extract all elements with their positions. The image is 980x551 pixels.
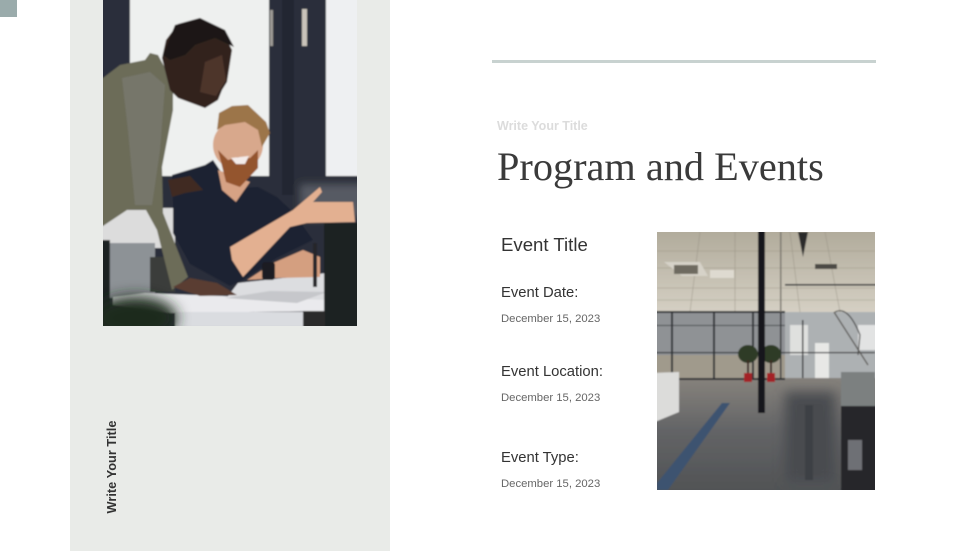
far desk surface — [225, 273, 327, 300]
man 1 hand on desk — [173, 278, 237, 296]
man 1 head and neck — [162, 18, 232, 108]
ceiling vent — [664, 262, 708, 276]
event location block: Event Location: — [501, 364, 603, 380]
panel: left sidebar — [70, 0, 390, 551]
desk — [113, 293, 327, 313]
man 1 shirt — [95, 53, 188, 290]
event location block — [501, 364, 603, 404]
top divider line — [492, 60, 876, 63]
ceiling tile grid — [658, 240, 874, 312]
photo: two colleagues at a desk — [103, 0, 357, 326]
central column — [758, 225, 765, 413]
event title: Event Title — [501, 234, 588, 255]
photo: empty office hall — [657, 232, 875, 490]
event date block — [501, 285, 600, 325]
corner square accent — [0, 0, 17, 17]
right dark desk — [841, 372, 875, 410]
event type block — [501, 450, 600, 490]
plants — [738, 345, 758, 363]
event date block: December 15, 2023 — [501, 313, 600, 325]
eyebrow label: Write Your Title — [497, 119, 588, 133]
event type block: Event Type: — [501, 450, 579, 466]
event location block: December 15, 2023 — [501, 392, 600, 404]
floor reflections — [785, 392, 835, 482]
title: Program and Events — [497, 144, 824, 189]
left white cabinet — [657, 371, 680, 422]
window mullions — [650, 284, 880, 380]
man 2 neck and head — [218, 170, 250, 202]
man 2 shirt — [172, 160, 313, 286]
man 2 arms and watch — [247, 250, 320, 280]
blue floor strip — [657, 403, 730, 490]
vertical caption: Write Your Title — [104, 421, 119, 513]
event type block: December 15, 2023 — [501, 478, 600, 490]
event date block: Event Date: — [501, 285, 578, 301]
man 1 hand on shoulder — [168, 176, 203, 197]
